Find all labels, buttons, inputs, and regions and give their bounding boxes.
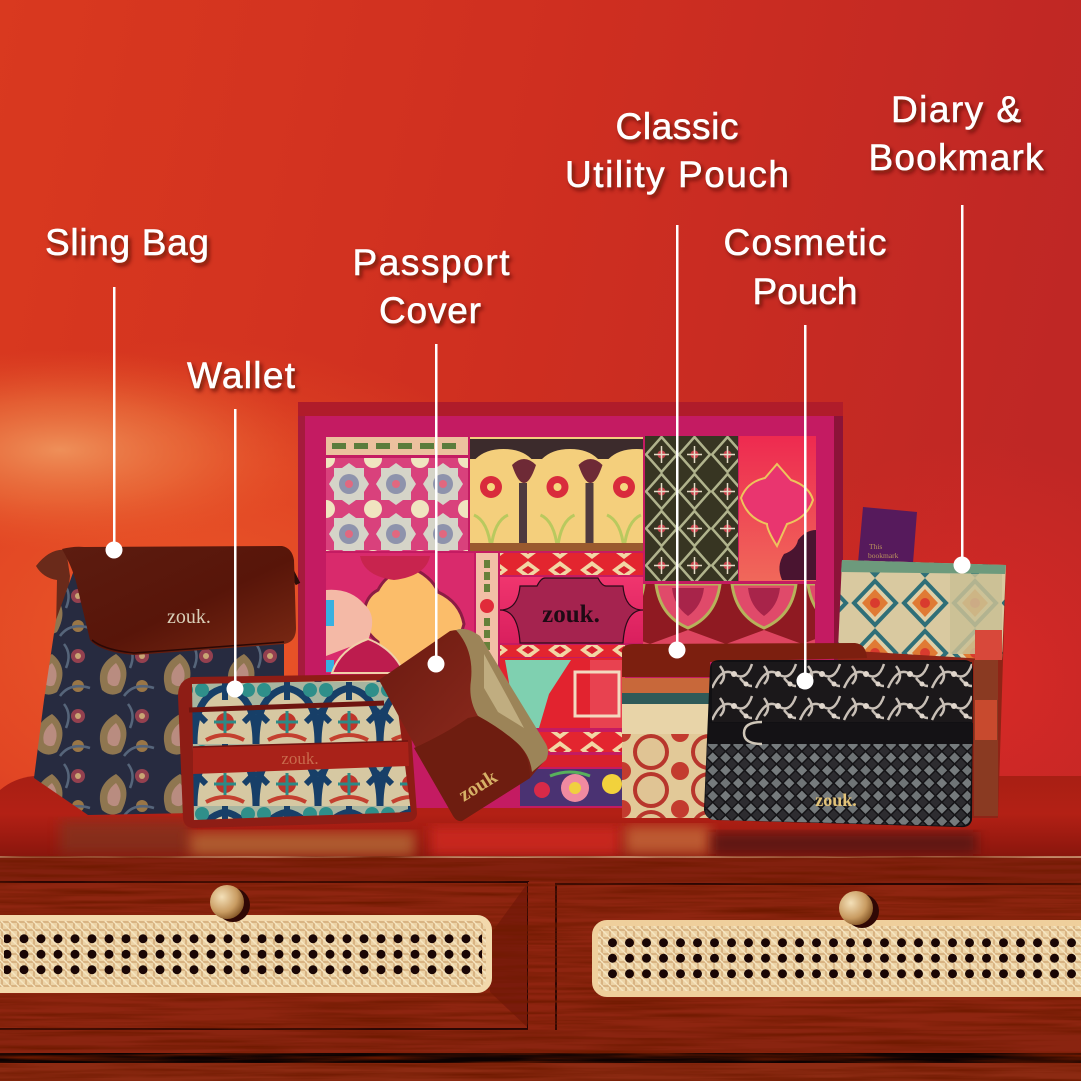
bookmark: This: [869, 542, 882, 551]
classic utility pouch: [622, 643, 867, 818]
left knob: [210, 885, 250, 922]
callout: sling bag: [45, 222, 209, 558]
box art: floral strip: [520, 769, 625, 806]
bookmark: [858, 507, 917, 563]
cosmetic pouch: zouk.: [815, 790, 857, 810]
callout: passport cover: [352, 242, 510, 672]
box art: diamond border: [500, 553, 643, 575]
callout: classic utility pouch: Utility Pouch: [565, 154, 789, 195]
callout: diary and bookmark: [868, 89, 1044, 574]
box art: green panel: [645, 436, 738, 581]
buckle: [744, 722, 762, 744]
right knob: [839, 891, 879, 928]
sling bag: [34, 546, 298, 815]
callout: classic utility pouch: [565, 106, 789, 658]
box art: red paisley panel: [643, 584, 815, 644]
wallet: [178, 674, 417, 828]
callout: cosmetic pouch: [724, 222, 886, 690]
box art: vertical strip: [476, 553, 498, 673]
passport cover: zouk: [455, 765, 502, 806]
callout: wallet: Wallet: [187, 355, 296, 396]
passport cover: [379, 629, 548, 821]
callout: passport cover: Passport: [352, 242, 510, 283]
left cane panel: [0, 918, 489, 990]
callout: classic utility pouch: Classic: [616, 106, 738, 147]
callout: cosmetic pouch: Cosmetic: [724, 222, 886, 263]
lower leather: [414, 716, 530, 821]
fur panel: [456, 629, 548, 772]
diary and bookmark: [838, 507, 1006, 818]
callout: diary and bookmark: Bookmark: [868, 137, 1044, 178]
right cane panel: [595, 923, 1081, 994]
box art: coral panel: [739, 436, 816, 581]
logo: zouk.: [167, 606, 211, 628]
box art: moroccan panel: [326, 553, 474, 676]
box art: teal motif panel: [500, 658, 625, 728]
callout: wallet: [187, 355, 296, 698]
cosmetic pouch: [704, 660, 973, 827]
box art: logo plaque: zouk.: [542, 601, 600, 628]
callout: diary and bookmark: Diary &: [891, 89, 1021, 130]
box art: logo plaque: [500, 577, 643, 643]
box art: tile panel: [326, 437, 468, 551]
callout: sling bag: Sling Bag: [45, 222, 209, 263]
chest of drawers: [0, 856, 1081, 1081]
callout: passport cover: Cover: [379, 290, 481, 331]
strap: [36, 550, 70, 631]
box art: arch panel: [470, 437, 643, 551]
gift box: [298, 402, 843, 808]
flap: [62, 546, 296, 655]
wallet: zouk.: [281, 749, 319, 768]
table top: [0, 776, 1081, 860]
callout: cosmetic pouch: Pouch: [752, 271, 858, 312]
bookmark: bookmark: [868, 551, 899, 560]
